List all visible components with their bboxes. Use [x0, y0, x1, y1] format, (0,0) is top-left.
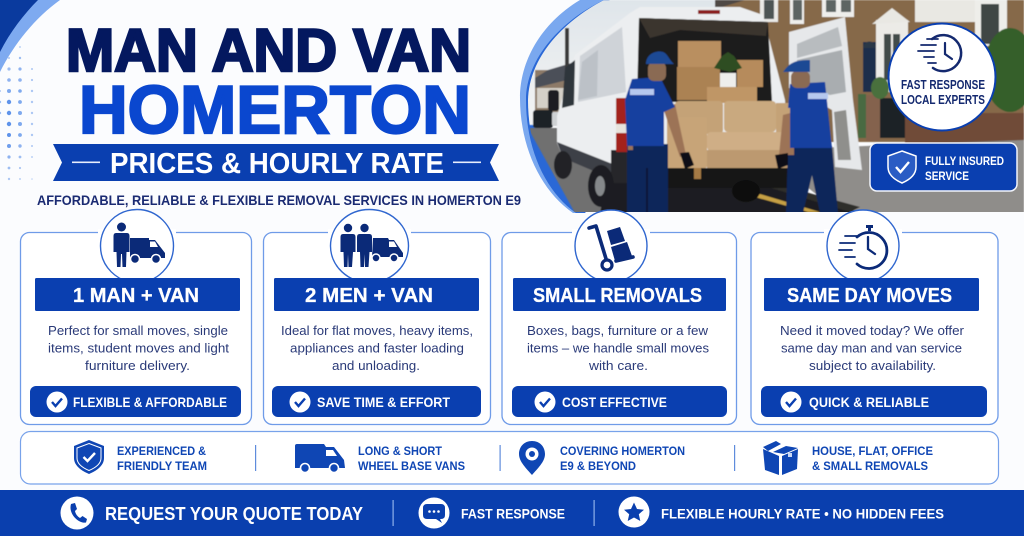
panel: 1 man + van: furniture delivery.	[85, 358, 190, 373]
tagline: AFFORDABLE, RELIABLE & FLEXIBLE REMOVAL SERVICES IN HOMERTON E9	[37, 192, 521, 208]
panel: 2 men + van: Ideal for flat moves, heavy items,	[281, 323, 473, 338]
feature: coverage pin	[519, 441, 685, 475]
badge: fast response local experts: LOCAL EXPERTS	[901, 93, 985, 107]
hero photo: movers loading a van	[520, 0, 1024, 214]
icon: speeding clock	[918, 35, 961, 71]
badge: fully insured service	[870, 143, 1017, 191]
footer bar: FAST RESPONSE	[461, 506, 565, 522]
feature: experienced team	[74, 440, 207, 474]
icon: stopwatch	[827, 210, 899, 282]
footer bar: FLEXIBLE HOURLY RATE • NO HIDDEN FEES	[661, 506, 944, 522]
icon: chat bubble	[418, 498, 450, 528]
icon: insured shield	[888, 151, 916, 183]
hero photo arc frame	[520, 0, 610, 213]
corner swoosh decoration	[0, 0, 60, 72]
icon: hand truck with boxes	[575, 210, 647, 282]
button: flexible and affordable	[30, 386, 241, 417]
icon: two men and van	[330, 210, 408, 282]
feature: coverage pin: COVERING HOMERTON	[560, 444, 685, 458]
feature: vans: LONG & SHORT	[358, 444, 443, 458]
photo road and pavement	[530, 127, 602, 212]
ribbon: prices and hourly rate	[53, 144, 499, 181]
button: quick and reliable	[761, 386, 987, 417]
photo cargo boxes and plant	[677, 41, 763, 103]
photo distant car	[533, 110, 553, 128]
button: cost effective: COST EFFECTIVE	[562, 395, 667, 410]
panel: 1 man + van: Perfect for small moves, single	[48, 323, 228, 338]
footer bar: REQUEST YOUR QUOTE TODAY	[105, 504, 363, 524]
photo mover left	[625, 52, 694, 214]
feature: experienced team: FRIENDLY TEAM	[117, 459, 207, 473]
panel: small removals: Boxes, bags, furniture or a few	[527, 323, 709, 338]
ribbon: prices and hourly rate: PRICES & HOURLY RATE	[110, 148, 444, 180]
panel: small removals	[502, 210, 736, 424]
feature: removals box: HOUSE, FLAT, OFFICE	[812, 444, 933, 458]
photo van body	[548, 7, 790, 207]
panel: same day moves: same day man and van service	[781, 340, 962, 356]
button: save time and effort	[272, 386, 481, 417]
feature: removals box	[763, 441, 933, 475]
halftone dots	[0, 46, 33, 180]
panel: same day moves: Need it moved today? We offer	[780, 323, 965, 338]
panel: same day moves: SAME DAY MOVES	[787, 285, 952, 307]
panel: small removals: items – we handle small moves	[527, 340, 709, 356]
photo brick wall and hedge	[858, 28, 1024, 145]
badge: fast response local experts	[888, 24, 996, 130]
photo mover right	[775, 60, 838, 213]
button: save time and effort: SAVE TIME & EFFORT	[317, 395, 451, 410]
badge: fully insured service: FULLY INSURED	[925, 156, 1004, 168]
feature: vans	[295, 444, 465, 473]
feature: experienced team: EXPERIENCED &	[117, 444, 206, 458]
panel: same day moves: subject to availability.	[809, 358, 936, 373]
photo buildings	[535, 0, 1024, 142]
panel: 1 man + van: 1 MAN + VAN	[73, 285, 199, 307]
panel: 1 man + van: items, student moves and light	[48, 340, 229, 356]
footer bar	[0, 490, 1024, 536]
photo open rear door	[789, 17, 862, 170]
icon: star	[618, 496, 650, 528]
title: homerton: HOMERTON	[79, 72, 471, 148]
panel: 2 men + van: 2 MEN + VAN	[305, 285, 433, 307]
feature strip	[20, 432, 998, 484]
photo sky	[528, 0, 716, 126]
badge: fast response local experts: FAST RESPONSE	[901, 78, 985, 92]
panel: 2 men + van: and unloading.	[332, 358, 420, 373]
icon: man and van	[100, 210, 174, 282]
panel: small removals: SMALL REMOVALS	[533, 285, 702, 307]
badge: fully insured service: SERVICE	[925, 171, 969, 183]
title: man and van: MAN AND VAN	[66, 17, 471, 84]
photo sofa	[667, 101, 797, 179]
panel: same day moves	[751, 210, 998, 424]
panel: 2 men + van: appliances and faster loading	[290, 340, 464, 356]
feature: vans: WHEEL BASE VANS	[358, 459, 465, 473]
panel: 2 men + van	[264, 210, 490, 424]
panel: 1 man + van	[20, 210, 252, 424]
button: flexible and affordable: FLEXIBLE & AFFORDABLE	[73, 395, 227, 410]
panel: small removals: with care.	[588, 358, 648, 373]
feature: coverage pin: E9 & BEYOND	[560, 459, 636, 473]
button: quick and reliable: QUICK & RELIABLE	[809, 395, 929, 410]
icon: phone	[60, 496, 94, 530]
feature: removals box: & SMALL REMOVALS	[812, 459, 928, 473]
button: cost effective	[512, 386, 727, 417]
